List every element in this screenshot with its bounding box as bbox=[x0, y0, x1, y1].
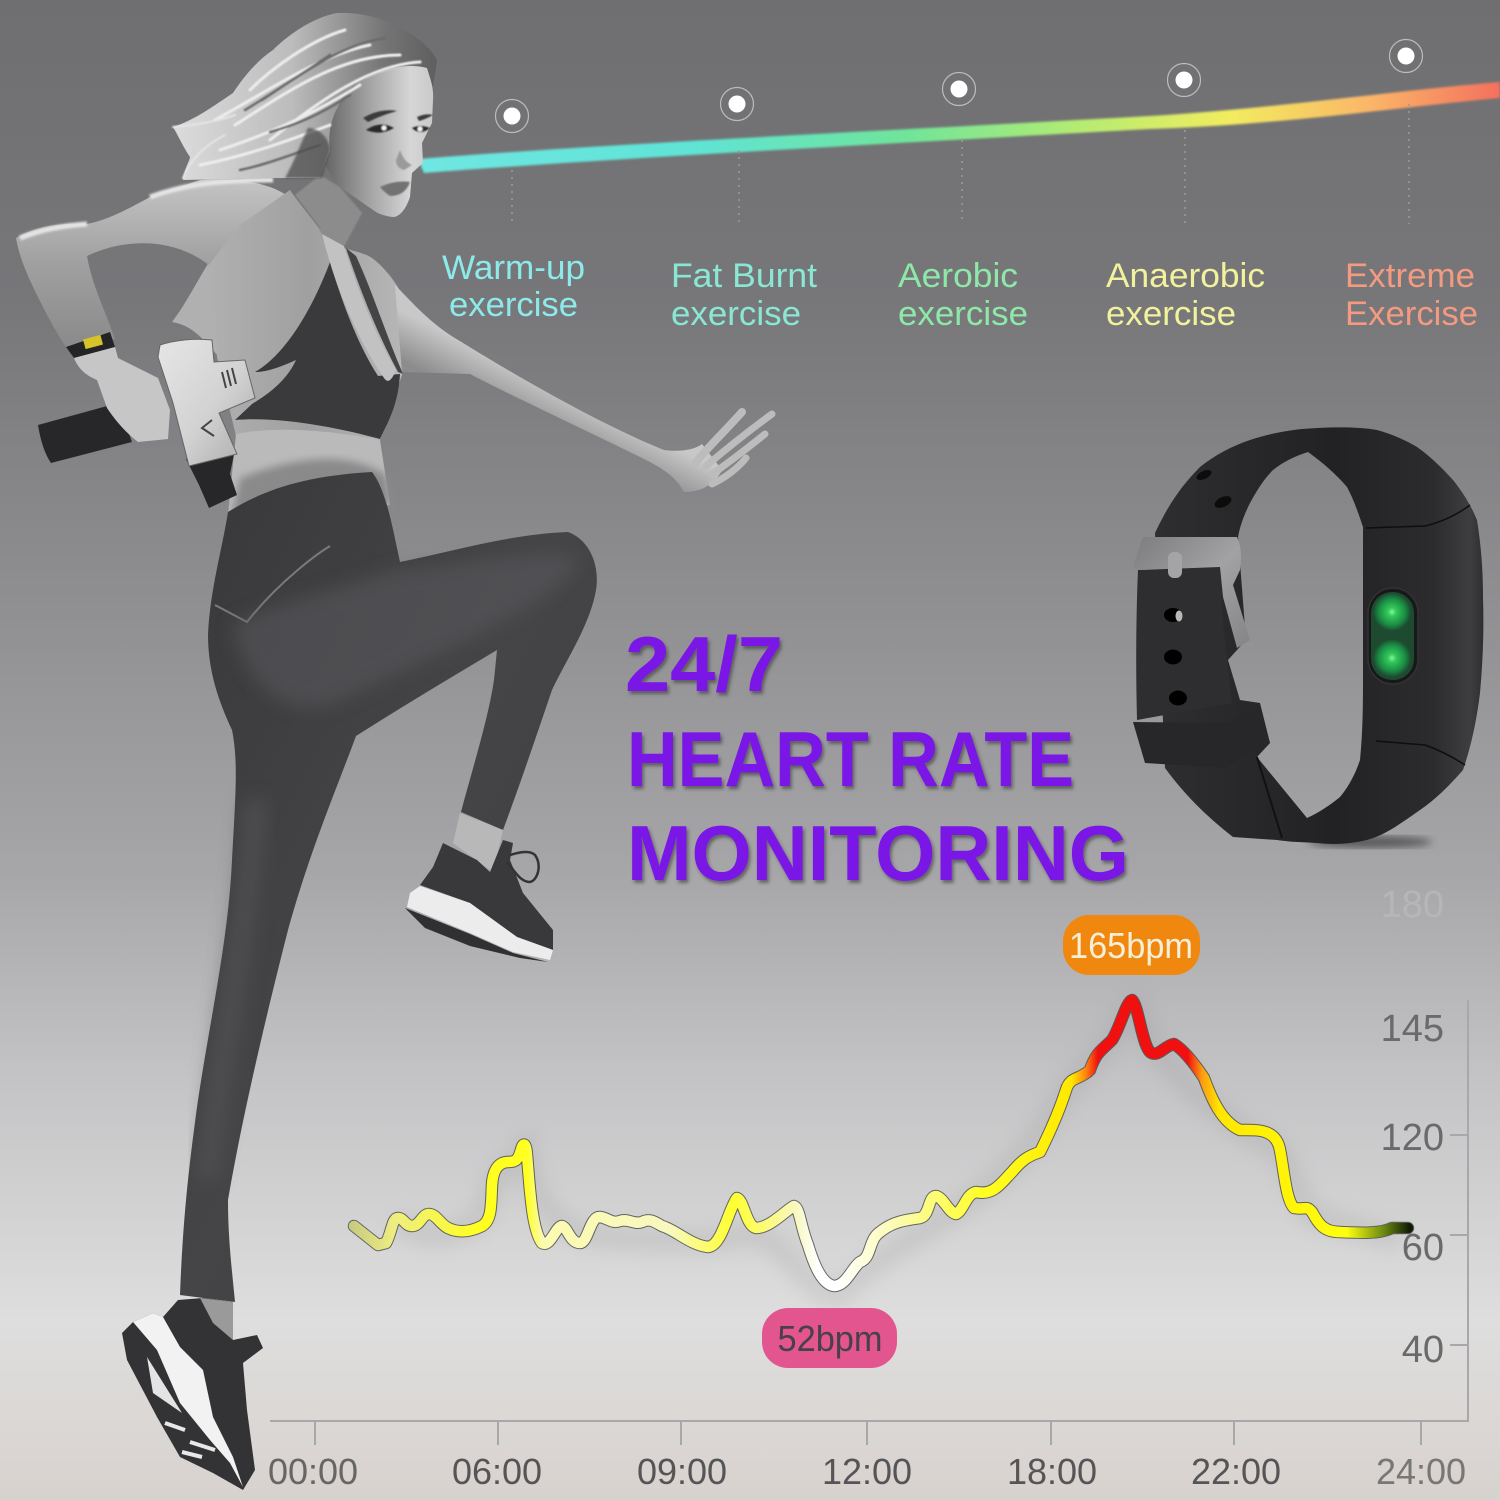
arm highlight bbox=[20, 180, 273, 238]
y axis labels: 180 bbox=[1381, 884, 1444, 926]
label: fat burnt: Fat Burnt bbox=[671, 257, 818, 295]
zone labels bbox=[442, 249, 1478, 333]
strap loop and module bbox=[1155, 427, 1483, 844]
buckle pin bbox=[1168, 552, 1182, 578]
label: extreme: Exercise bbox=[1345, 295, 1478, 333]
neck bbox=[295, 175, 362, 250]
colour zone ribbon bbox=[418, 82, 1500, 173]
massage gun attachment bbox=[186, 449, 237, 508]
ear and dark hair under bbox=[285, 128, 330, 178]
label: fat burnt: exercise bbox=[671, 295, 801, 333]
leggings bbox=[180, 472, 597, 1302]
wristband product bbox=[1133, 427, 1483, 848]
peak callout 165bpm: 165bpm bbox=[1069, 925, 1193, 966]
wrist band bbox=[66, 332, 115, 358]
title line 1: 24/7 bbox=[625, 620, 783, 708]
marker: aerobic bbox=[942, 72, 976, 224]
heart rate curve colour bbox=[354, 1000, 1408, 1286]
extended arm and hand bbox=[395, 285, 722, 492]
zone markers bbox=[496, 40, 1422, 226]
x axis labels: 09:00 bbox=[637, 1451, 727, 1492]
label: aerobic: exercise bbox=[898, 295, 1028, 333]
x axis labels: 22:00 bbox=[1191, 1451, 1281, 1492]
heart rate chart bbox=[268, 884, 1468, 1492]
lower strap seam bbox=[1257, 757, 1282, 838]
label: warm-up: Warm-up bbox=[442, 249, 585, 287]
label: anaerobic: Anaerobic bbox=[1106, 257, 1265, 295]
y axis labels bbox=[1381, 884, 1444, 1371]
strap right edge bbox=[346, 248, 403, 374]
peak callout 165bpm bbox=[1063, 915, 1200, 975]
marker: extreme bbox=[1390, 40, 1422, 224]
gripping hand bbox=[74, 347, 170, 442]
title line 2: HEART RATE bbox=[627, 715, 1074, 803]
lower shoe bbox=[122, 1298, 263, 1490]
buckled strap bbox=[1136, 567, 1232, 720]
hip highlight bbox=[232, 555, 580, 707]
calf highlight bbox=[196, 800, 268, 1180]
heart rate curve outline bbox=[354, 1000, 1408, 1286]
facial features bbox=[363, 110, 433, 196]
label: aerobic: Aerobic bbox=[898, 257, 1018, 295]
rear arm bbox=[16, 179, 293, 347]
module seam lines bbox=[1366, 505, 1470, 765]
hair bbox=[173, 13, 437, 180]
x axis labels: 24:00 bbox=[1376, 1451, 1466, 1492]
upper shoe bbox=[405, 813, 553, 962]
low callout 52bpm: 52bpm bbox=[778, 1318, 882, 1359]
athlete figure bbox=[16, 13, 772, 1490]
label: anaerobic: exercise bbox=[1106, 295, 1236, 333]
axes bbox=[270, 1000, 1468, 1445]
x axis labels: 06:00 bbox=[452, 1451, 542, 1492]
silver buckle bbox=[1133, 537, 1250, 648]
x axis labels: 18:00 bbox=[1007, 1451, 1097, 1492]
midriff shadow bbox=[232, 459, 392, 515]
title bbox=[625, 620, 1129, 897]
marker: fat burnt bbox=[720, 88, 754, 224]
massage gun vents and logo bbox=[202, 368, 236, 436]
heart rate curve shadow bbox=[395, 1010, 1400, 1295]
low callout 52bpm bbox=[762, 1308, 897, 1368]
strap holes bbox=[1164, 468, 1233, 706]
hair strands bbox=[173, 30, 420, 178]
x axis labels: 00:00 bbox=[268, 1451, 358, 1492]
marker: anaerobic bbox=[1168, 64, 1200, 224]
y axis labels: 120 bbox=[1381, 1117, 1444, 1159]
title line 3: MONITORING bbox=[627, 809, 1129, 897]
label: warm-up: exercise bbox=[449, 286, 578, 324]
ground shadow bbox=[1308, 836, 1432, 848]
massage gun handle bbox=[38, 403, 132, 463]
face bbox=[320, 66, 433, 217]
back hair lock bbox=[172, 262, 226, 356]
sports bra bbox=[235, 262, 400, 439]
neck strap bbox=[322, 234, 396, 381]
keeper loop bbox=[1133, 703, 1270, 768]
x axis labels: 12:00 bbox=[822, 1451, 912, 1492]
x axis labels bbox=[268, 1451, 1466, 1492]
upper torso bbox=[209, 190, 410, 440]
y axis labels: 40 bbox=[1402, 1329, 1444, 1371]
midriff bbox=[228, 430, 390, 515]
massage gun body bbox=[158, 339, 255, 466]
fingers bbox=[696, 412, 772, 484]
heart rate sensor bbox=[1368, 588, 1418, 684]
label: extreme: Extreme bbox=[1345, 257, 1475, 295]
marker: warm-up bbox=[496, 100, 528, 226]
y axis labels: 145 bbox=[1381, 1008, 1444, 1050]
waistband seam bbox=[215, 546, 330, 622]
y axis labels: 60 bbox=[1402, 1227, 1444, 1269]
